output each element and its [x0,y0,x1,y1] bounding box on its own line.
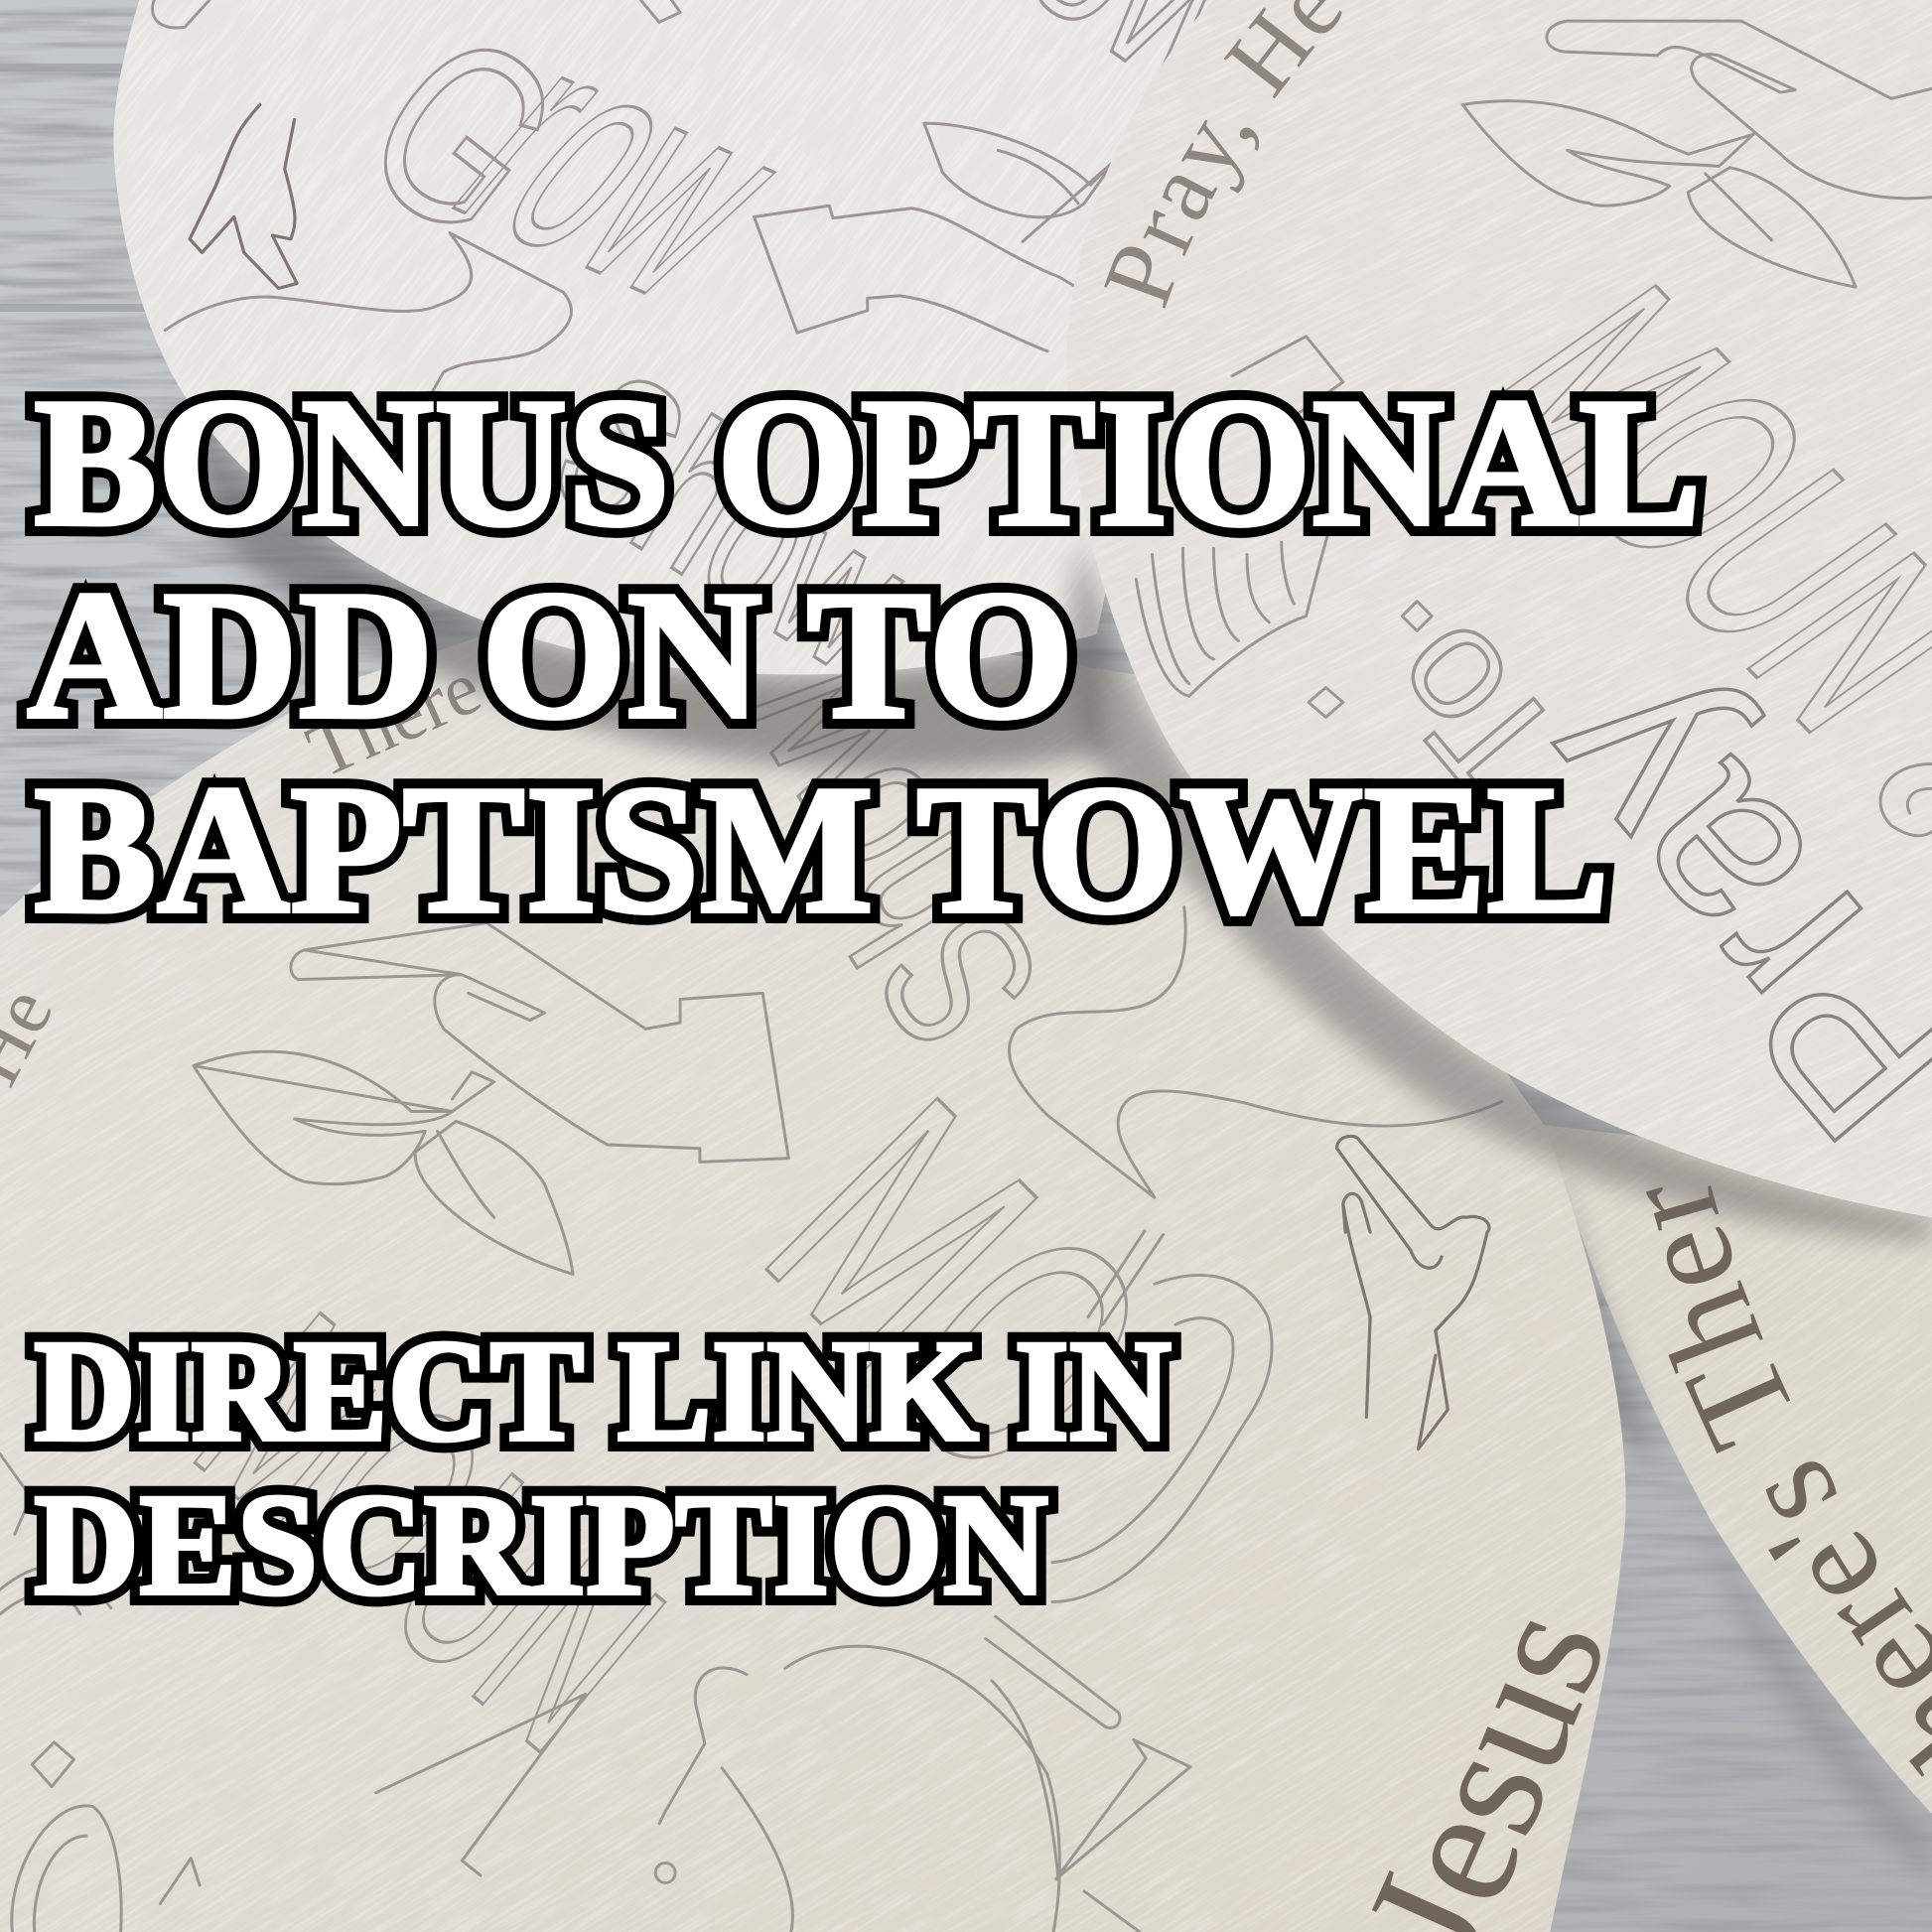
icon: swirl [165,233,571,407]
icon: sprout leaves [194,1051,573,1274]
icon: praying hands [1136,337,1343,696]
disc: top right [1066,0,1932,1217]
shadow under top right disc [1069,542,1932,1242]
icon: text fragment top [153,0,680,28]
icon: large letter loop [1052,1231,1272,1601]
icon: arc, letters and fragments lower [0,1453,1190,1932]
outlined word: Mountain upper: MO [701,1033,1219,1550]
subheading: line 2: DESCRIPTION [34,1463,1048,1625]
icon: arrow hand [755,206,1090,351]
outlined word: Show: Show [677,627,1085,1086]
shadow on table from lower discs [1701,1522,1932,1885]
disc: lower right [1545,1125,1932,1814]
shadow under lower left disc [1544,1125,1657,1466]
heading: line 1: BONUS OPTIONAL [34,360,1702,565]
icon: small squares [1309,602,1432,717]
disc: top left [71,0,1932,1205]
heading: line 3: BAPTISM TOWEL [34,748,1609,952]
icon: hand top [1547,21,1932,199]
icon: pointing hand [1337,1136,1489,1449]
icon: sprout leaves [924,123,1115,241]
subheading: line 1: DIRECT LINK IN [34,1310,1172,1471]
heading: line 2: ADD ON TO [27,553,1074,758]
outlined word: Mountain left: MOUN [146,1257,715,1806]
icon: sprout leaves [1462,101,1856,287]
shadow cast by top left disc [184,394,1109,771]
engraved text: There: There [295,643,492,794]
icon: letter fragment right [1880,763,1932,836]
icon: pointing hand [190,104,297,288]
outlined word: To: To [1351,590,1596,834]
icon: swirl [1009,906,1502,1197]
outlined word: Show: Show [518,328,944,714]
icon: pointing hand outline [291,923,788,1162]
